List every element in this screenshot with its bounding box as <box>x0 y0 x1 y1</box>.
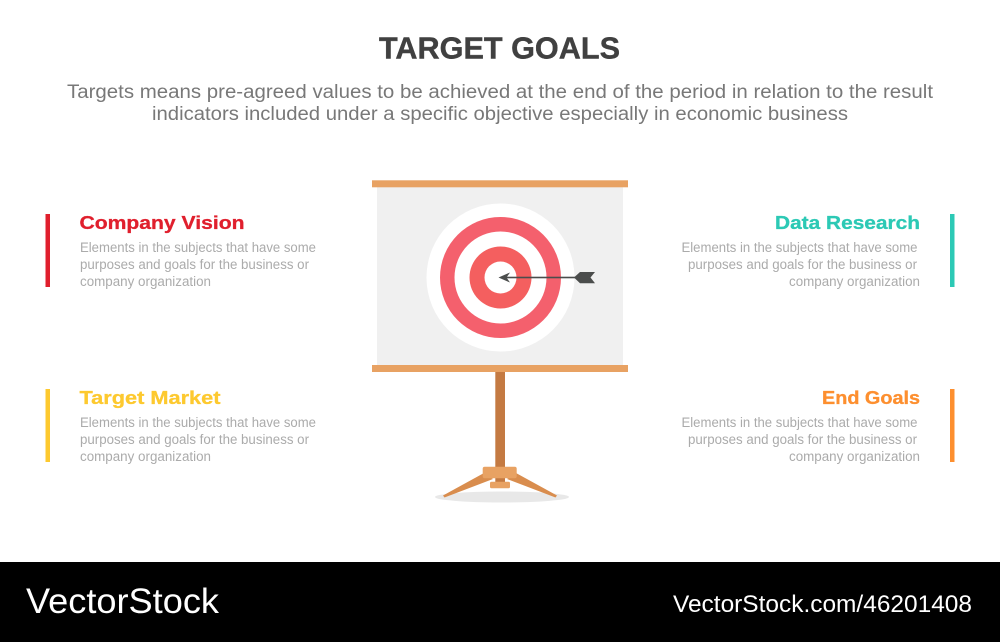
arrow <box>498 272 595 283</box>
panel: data research: company organization <box>789 274 920 289</box>
panel: data research: purposes and goals for the business or <box>688 257 917 272</box>
panel: company vision: purposes and goals for the business or <box>80 257 309 272</box>
panel: end goals: Elements in the subjects that have some <box>682 415 918 430</box>
panel: target market: company organization <box>80 449 211 464</box>
panel: target market: Target Market <box>80 387 220 408</box>
subtitle text: Targets means pre-agreed values to be achieved at the end of the period in relation to the result <box>67 82 934 103</box>
icon: presentation board with target <box>372 180 628 503</box>
panel: end goals: purposes and goals for the business or <box>688 432 917 447</box>
image url: VectorStock.com/46201408 <box>673 591 972 618</box>
title: TARGET GOALS <box>379 30 620 66</box>
subtitle text: indicators included under a specific objective especially in economic business <box>152 104 848 125</box>
panel: end goals: End Goals <box>822 387 920 408</box>
panel: data research <box>682 212 954 289</box>
panel: company vision: Elements in the subjects that have some <box>80 240 316 255</box>
board panel <box>377 187 623 365</box>
stand clamp <box>483 467 517 478</box>
panel: target market: Elements in the subjects that have some <box>80 415 316 430</box>
panel: data research: Data Research <box>775 212 920 233</box>
board top rail <box>372 180 628 187</box>
panel: end goals <box>682 387 954 464</box>
stand foot <box>490 482 510 488</box>
brand name: VectorStock <box>26 582 220 621</box>
board bottom rail <box>372 365 628 372</box>
panel: target market: purposes and goals for the business or <box>80 432 309 447</box>
subtitle text <box>67 82 934 125</box>
target rings <box>426 204 574 352</box>
stand legs <box>443 473 557 498</box>
panel: data research: Elements in the subjects that have some <box>682 240 918 255</box>
panel: company vision: Company Vision <box>80 212 245 233</box>
panel: company vision: company organization <box>80 274 211 289</box>
panel: company vision <box>46 212 316 289</box>
stand pole <box>495 372 505 484</box>
floor shadow <box>435 492 569 502</box>
panel: end goals: company organization <box>789 449 920 464</box>
panel: target market <box>46 387 316 464</box>
watermark footer bar <box>0 562 1000 642</box>
